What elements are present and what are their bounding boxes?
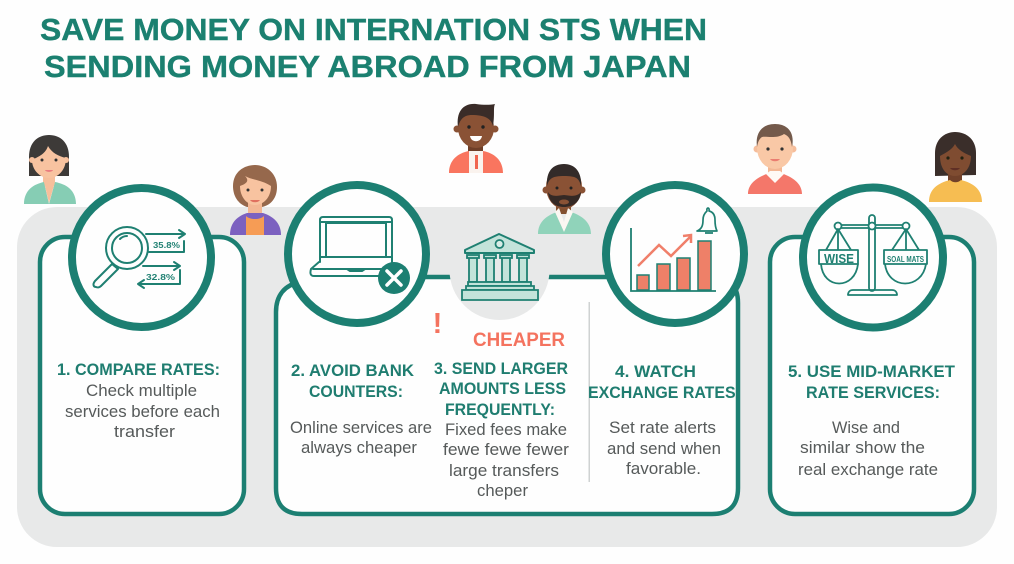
text block: step 4: EXCHANGE RATES: (588, 384, 741, 402)
text block: step 2 (290, 362, 432, 457)
text block: step 3: 3. SEND LARGER (434, 360, 568, 378)
text block: step 4: Set rate alerts (609, 419, 716, 437)
text block: step 5 (788, 363, 955, 479)
icon circle 5: mid-market rate (803, 188, 943, 328)
icon: rate arrows (138, 230, 185, 288)
icon: rate arrows: 32.8% (146, 272, 176, 282)
icon circle 1: compare rates (72, 188, 211, 327)
text block: step 3: large transfers (449, 462, 559, 480)
title: SAVE MONEY ON INTERNATION STS WHEN (40, 12, 707, 47)
icon: bank (462, 234, 538, 300)
bank badge background (450, 220, 550, 320)
panel: card 5 (770, 237, 974, 514)
text block: step 3: AMOUNTS LESS (439, 380, 566, 398)
text block: step 2: Online services are (290, 419, 432, 437)
title: SENDING MONEY ABROAD FROM JAPAN (44, 49, 691, 84)
icon: balance scale: SOAL MATS (887, 254, 924, 264)
icon: balance scale: WISE (824, 252, 854, 266)
icon: laptop (310, 217, 392, 276)
text block: step 1: services before each (65, 403, 220, 421)
icon: cross badge (378, 262, 410, 294)
text block: step 1: Check multiple (86, 382, 197, 400)
text block: step 4: 4. WATCH (615, 363, 696, 381)
person 1 (24, 135, 76, 204)
text block: step 2: always cheaper (301, 439, 418, 457)
icon circle 2: avoid bank counters (288, 185, 426, 323)
icon: rate arrows: 35.8% (153, 240, 180, 250)
callout: exclamation mark: ! (433, 308, 442, 340)
text block: step 1 (57, 361, 220, 441)
text block: step 5: real exchange rate (798, 461, 938, 479)
text block: step 4: and send when (607, 440, 721, 458)
panel: combined card 2 to 4 (276, 277, 738, 514)
text block: step 4 (588, 363, 741, 478)
text block: step 2: COUNTERS: (309, 383, 403, 401)
person 5 (748, 124, 802, 194)
person 4 (538, 164, 591, 234)
text block: step 1: 1. COMPARE RATES: (57, 361, 220, 379)
text block: step 3: cheper (477, 482, 529, 500)
text block: step 1: transfer (114, 423, 176, 441)
text block: step 3: Fixed fees make (445, 421, 567, 439)
icon circle 4: watch exchange rates (606, 185, 744, 323)
divider between step 3 and 4 (588, 302, 590, 482)
text block: step 5: 5. USE MID-MARKET (788, 363, 955, 381)
person 2 (230, 165, 281, 235)
person 6 (929, 132, 982, 202)
text block: step 3: fewe fewe fewer (443, 441, 570, 459)
text block: step 4: favorable. (626, 460, 701, 478)
text block: step 3: FREQUENTLY: (445, 401, 555, 419)
text block: step 2: 2. AVOID BANK (291, 362, 414, 380)
text block: step 3 (434, 360, 570, 500)
title (40, 12, 707, 84)
icon: balance scale (819, 215, 927, 295)
person 3 (449, 104, 503, 173)
panel: card 1 (40, 237, 244, 514)
callout: cheaper: CHEAPER (473, 330, 565, 351)
icon: magnifier (93, 227, 148, 287)
icon: bell (697, 208, 717, 233)
icon: rising bar chart (631, 228, 716, 291)
panel: grey background (17, 207, 997, 547)
text block: step 5: Wise and (832, 419, 900, 437)
text block: step 5: RATE SERVICES: (806, 384, 940, 402)
text block: step 5: similar show the (800, 439, 925, 457)
